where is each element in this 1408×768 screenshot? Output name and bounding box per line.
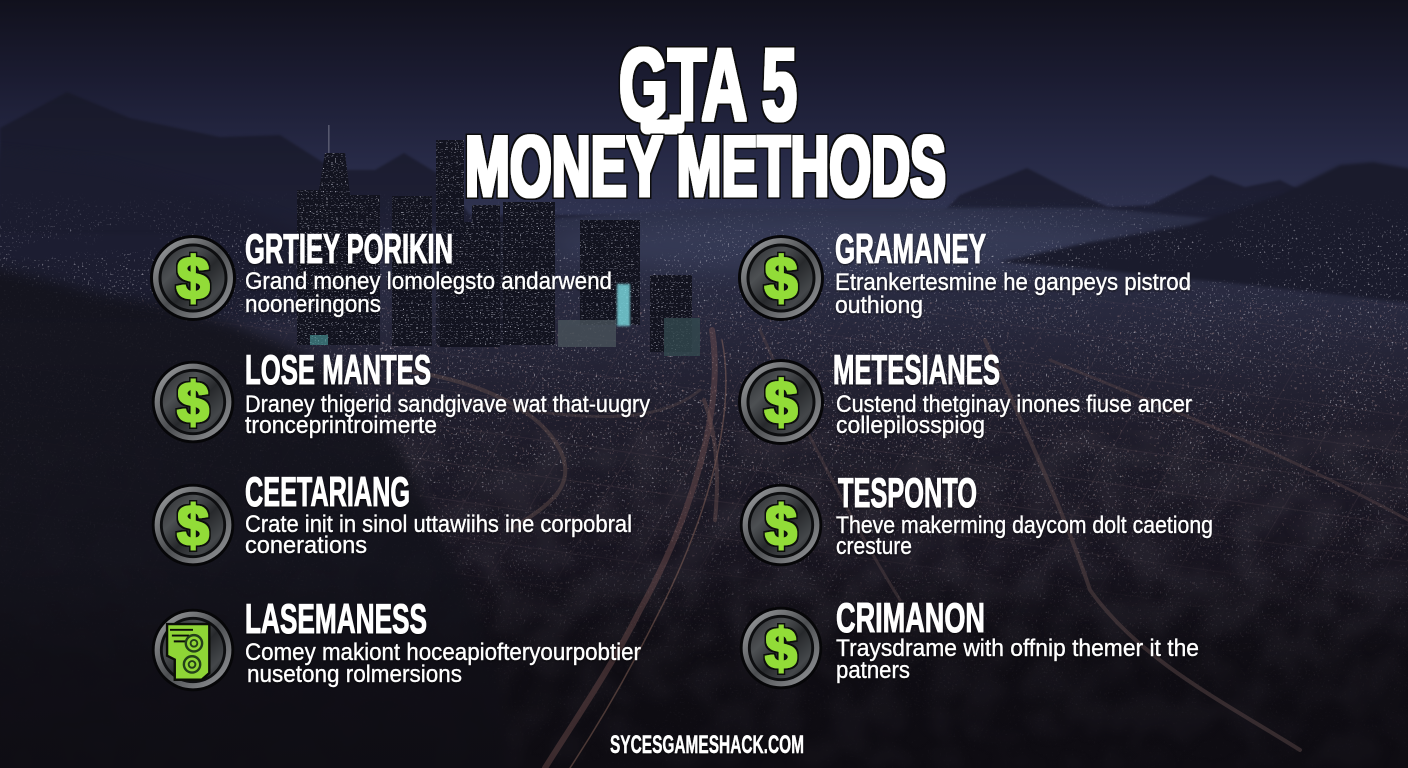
roads <box>400 330 1408 768</box>
heading: GRTIEY PORIKIN <box>245 225 453 272</box>
icon: dollar coin: $ <box>765 494 797 558</box>
description: Traysdrame with offnip themer it the <box>836 635 1199 662</box>
left dark hillside <box>0 262 510 768</box>
icon: dollar coin <box>150 235 236 321</box>
method 5 <box>738 225 1191 321</box>
icon: dollar coin: $ <box>177 371 209 435</box>
footer website: SYCESGAMESHACK.COM <box>610 731 804 759</box>
icon: dollar coin: $ <box>177 494 209 558</box>
right dark hill <box>1000 162 1408 305</box>
downtown skyline <box>290 125 700 356</box>
description: patners <box>836 657 910 684</box>
icon: dollar coin: $ <box>764 245 798 312</box>
icon: dollar coin: $ <box>765 617 797 681</box>
description: Comey makiont hoceapiofteryourpobtier <box>245 639 641 666</box>
icon: dollar coin <box>152 484 234 566</box>
title line one <box>619 27 797 142</box>
method 6 <box>738 346 1192 445</box>
description: Draney thigerid sandgivave wat that-uugry <box>245 391 650 418</box>
description: Crate init in sinol uttawiihs ine corpobral <box>245 511 632 538</box>
far mountains <box>0 92 1408 300</box>
description: conerations <box>245 532 367 559</box>
description: cresture <box>836 533 912 560</box>
heading: CRIMANON <box>836 594 985 641</box>
heading: CEETARIANG <box>245 468 410 515</box>
icon: dollar coin <box>738 235 824 321</box>
heading: METESIANES <box>833 346 1000 393</box>
description: tronceprintroimerte <box>245 412 437 439</box>
description: Custend thetginay inones fiuse ancer <box>836 391 1192 418</box>
icon: green banknote document <box>152 609 234 691</box>
title line one: GTA 5 <box>619 27 797 142</box>
heading: LASEMANESS <box>245 595 427 642</box>
method 3 <box>152 468 632 566</box>
method 2 <box>152 346 650 443</box>
icon: dollar coin <box>738 359 824 445</box>
heading: GRAMANEY <box>835 225 986 272</box>
heading: TESPONTO <box>838 469 977 516</box>
city plain <box>0 208 1408 768</box>
horizon glow <box>550 215 1150 275</box>
lower dark neighbourhood <box>0 560 1408 768</box>
icon: dollar coin <box>740 607 822 689</box>
description: nusetong rolmersions <box>247 661 462 688</box>
left mountain slope <box>0 150 330 320</box>
icon: dollar coin: $ <box>764 369 798 436</box>
icon: dollar coin <box>152 361 234 443</box>
icon: dollar coin: $ <box>176 245 210 312</box>
description: Etrankertesmine he ganpeys pistrod <box>835 269 1191 296</box>
title line two: MONEY METHODS <box>465 119 946 215</box>
description: nooneringons <box>245 291 381 318</box>
method 8 <box>740 594 1199 689</box>
description: Theve makerming daycom dolt caetiong <box>836 512 1213 539</box>
title <box>465 27 946 215</box>
heading: LOSE MANTES <box>245 346 431 393</box>
street grid <box>228 300 1408 566</box>
description: Grand money lomolegsto andarwend <box>245 268 612 295</box>
city lights <box>0 195 1408 712</box>
dark tree blotches <box>0 430 1408 768</box>
icon: dollar coin <box>740 484 822 566</box>
method 1 <box>150 225 612 321</box>
description: collepilosspiog <box>836 412 985 439</box>
method 7 <box>740 469 1213 566</box>
method 4 <box>152 595 641 691</box>
description: outhiong <box>835 292 923 319</box>
